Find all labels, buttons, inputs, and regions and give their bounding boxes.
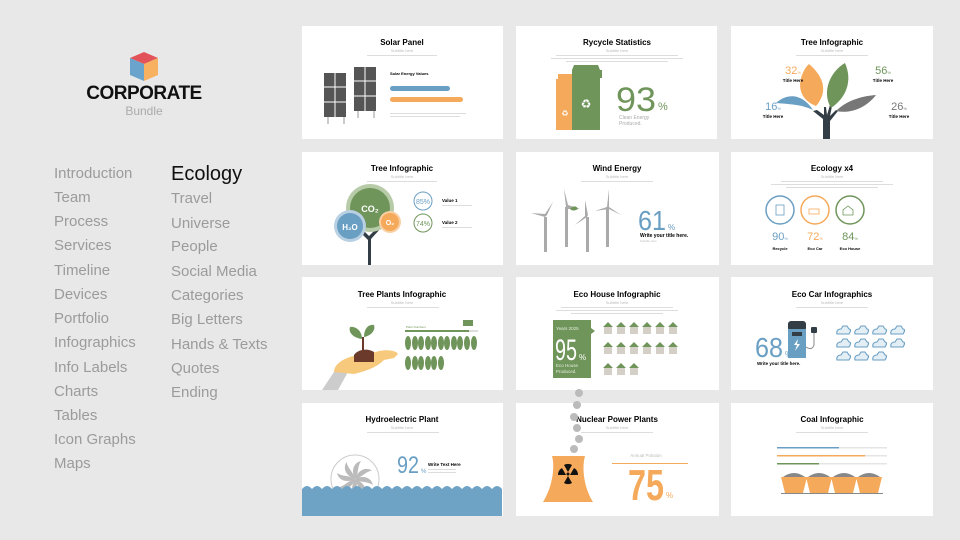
panel: tree plants: Plant Numbers	[406, 325, 426, 329]
menu: right column: Ecology	[171, 163, 242, 185]
panel: recycle statistics: Clean Energy	[619, 115, 650, 121]
panel: tree infographic 1: Title Here	[873, 78, 894, 83]
panel: ecology x4: Recycle	[772, 246, 788, 251]
panel: wind energy: Write your title here.	[640, 233, 689, 239]
panel: eco house: Years 2025	[556, 326, 579, 331]
panel: ecology x4: 84%	[842, 231, 858, 243]
menu: left column: Info Labels	[54, 359, 127, 376]
panel: eco house	[516, 277, 719, 390]
panel: tree plants: Subtitle here	[391, 300, 414, 305]
panel: recycle statistics: %	[658, 101, 668, 113]
logo: title: CORPORATE	[86, 83, 202, 104]
panel: tree infographic 1: 56%	[875, 65, 891, 77]
panel: tree infographic 2: Value 1	[442, 198, 458, 203]
menu: right column: Ending	[171, 384, 218, 401]
menu: right column: Categories	[171, 287, 244, 304]
panel: nuclear power plants: %	[666, 491, 673, 500]
menu: left column: Devices	[54, 286, 107, 303]
panel: nuclear power plants: 75	[628, 461, 664, 510]
panel: eco car: Write your title here.	[757, 361, 800, 366]
panel: tree infographic 1: Tree Infographic	[801, 38, 864, 47]
panel: tree infographic 1: Title Here	[889, 114, 910, 119]
panel: tree plants	[302, 277, 503, 390]
panel: ecology x4: Eco Car	[807, 246, 823, 251]
panel: tree infographic 2: Subtitle here	[391, 174, 414, 179]
panel: recycle statistics: 93	[616, 81, 656, 119]
panel: eco car: %	[785, 350, 792, 359]
panel: wind energy: Subtitle here	[640, 239, 657, 243]
panel: wind energy: Subtitle here	[606, 174, 629, 179]
menu: left column: Services	[54, 237, 112, 254]
panel: wind energy	[516, 152, 719, 265]
panel: eco car: Subtitle here	[821, 300, 844, 305]
panel: tree infographic 1: Subtitle here	[821, 48, 844, 53]
panel: recycle statistics: Subtitle here	[606, 48, 629, 53]
panel: solar panel: Subtitle here	[391, 48, 414, 53]
panel: hydroelectric plant	[302, 403, 503, 516]
panel: hydroelectric plant: 92	[397, 452, 419, 479]
panel: tree infographic 1: 16%	[765, 101, 781, 113]
panel: recycle statistics: ♻	[581, 97, 591, 111]
menu: right column: Universe	[171, 215, 230, 232]
panel: wind energy: Wind Energy	[593, 164, 642, 173]
menu: left column: Portfolio	[54, 310, 109, 327]
menu: left column: Tables	[54, 407, 97, 424]
panel: ecology x4: 72%	[807, 231, 823, 243]
panel: ecology x4: Eco House	[840, 246, 861, 251]
menu: left column: Team	[54, 189, 91, 206]
panel: eco house: Eco House Infographic	[573, 290, 661, 299]
menu: right column: People	[171, 238, 218, 255]
panel: wind energy: 61	[638, 205, 666, 236]
menu: right column: Social Media	[171, 263, 257, 280]
panel: tree plants: Tree Plants Infographic	[358, 290, 447, 299]
panel: hydroelectric plant: %	[421, 469, 427, 475]
menu: left column: Infographics	[54, 334, 136, 351]
panel: ecology x4: Ecology x4	[811, 164, 854, 173]
panel: tree infographic 2: H₂O	[342, 223, 358, 232]
panel: tree infographic 2: Tree Infographic	[371, 164, 434, 173]
panel: recycle statistics: Produced.	[619, 121, 642, 127]
panel: coal infographic	[731, 403, 933, 516]
panel: nuclear power plants	[516, 403, 719, 516]
menu: left column: Timeline	[54, 262, 110, 279]
panel: nuclear power plants: Subtitle here	[606, 425, 629, 430]
panel: tree infographic 2	[302, 152, 503, 265]
panel: coal infographic: Subtitle here	[821, 425, 844, 430]
panel: solar panel	[302, 26, 503, 139]
panel: eco car: 68	[755, 332, 783, 363]
logo: cube	[130, 52, 158, 81]
menu: left column: Maps	[54, 455, 91, 472]
menu: right column: Quotes	[171, 360, 219, 377]
panel: tree infographic 2: CO₂	[361, 204, 379, 214]
menu: right column	[171, 163, 267, 401]
panel: ecology x4: 90%	[772, 231, 788, 243]
panel: nuclear power plants: Nuclear Power Plants	[576, 415, 658, 424]
panel: ecology x4: Subtitle here	[821, 174, 844, 179]
panel: eco house: Subtitle here	[606, 300, 629, 305]
panel: tree infographic 2: O₂	[386, 220, 394, 227]
menu: right column: Hands & Texts	[171, 336, 267, 353]
panel: tree infographic 1: Title Here	[763, 114, 784, 119]
panel: tree infographic 2: Value 2	[442, 220, 458, 225]
panel: eco car	[731, 277, 933, 390]
menu: right column: Big Letters	[171, 311, 243, 328]
menu: left column: Process	[54, 213, 108, 230]
panel: tree infographic 1: Title Here	[783, 78, 804, 83]
panel: tree infographic 1: 26%	[891, 101, 907, 113]
panel: eco house: 95	[555, 334, 577, 367]
menu: left column: Charts	[54, 383, 98, 400]
panel: wind energy: %	[668, 223, 675, 232]
panel: solar panel: Solar Energy Values	[390, 71, 429, 76]
menu: left column: Introduction	[54, 165, 132, 182]
panel: hydroelectric plant: Subtitle here	[391, 425, 414, 430]
panel: coal infographic: Coal Infographic	[800, 415, 864, 424]
panel: eco house: Eco House	[556, 363, 579, 368]
panel: tree infographic 2: 74%	[416, 221, 430, 228]
panel: hydroelectric plant: Write Text Here	[428, 462, 461, 467]
logo: subtitle: Bundle	[125, 104, 163, 118]
menu: left column: Icon Graphs	[54, 431, 136, 448]
panel: hydroelectric plant: Hydroelectric Plant	[366, 415, 439, 424]
panel: solar panel: Solar Panel	[380, 38, 424, 47]
menu: left column	[54, 165, 136, 472]
panel: recycle statistics	[516, 26, 717, 139]
panel: tree infographic 1: 32%	[785, 65, 801, 77]
panel: eco house: %	[579, 353, 586, 362]
panel: recycle statistics: Rycycle Statistics	[583, 38, 652, 47]
menu: right column: Travel	[171, 190, 212, 207]
panel: nuclear power plants: Annual Polution	[630, 453, 662, 458]
panel: eco house: Produced.	[556, 369, 577, 374]
panel: recycle statistics: ♻	[561, 109, 569, 118]
panel: tree infographic 1	[731, 26, 933, 139]
panel: eco car: Eco Car Infographics	[792, 290, 873, 299]
panel: ecology x4	[731, 152, 933, 265]
panel: tree infographic 2: 85%	[416, 199, 430, 206]
